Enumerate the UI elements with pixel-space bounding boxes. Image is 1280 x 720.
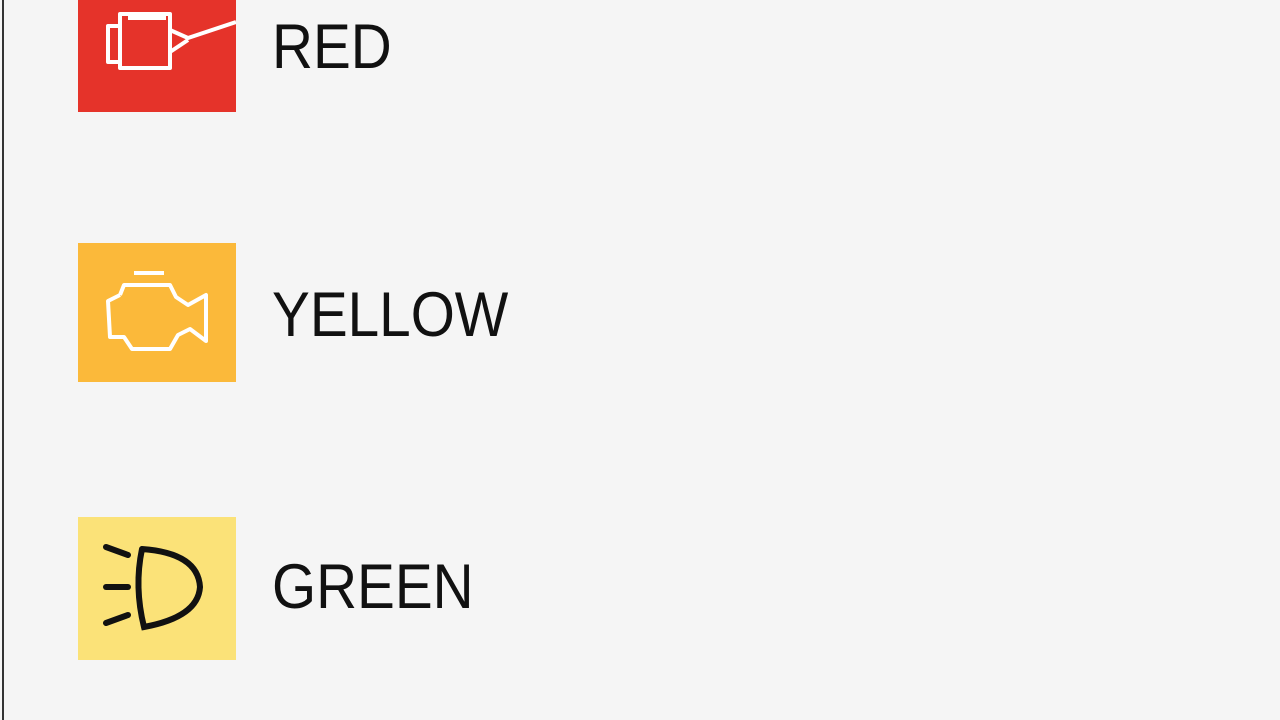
label: YELLOW: YELLOW: [272, 280, 508, 350]
icon: red oil can: [78, 0, 236, 112]
icon: yellow engine: [78, 243, 236, 382]
icon: green headlight: [78, 517, 236, 660]
label: RED: RED: [272, 12, 392, 82]
label: GREEN: GREEN: [272, 552, 474, 622]
